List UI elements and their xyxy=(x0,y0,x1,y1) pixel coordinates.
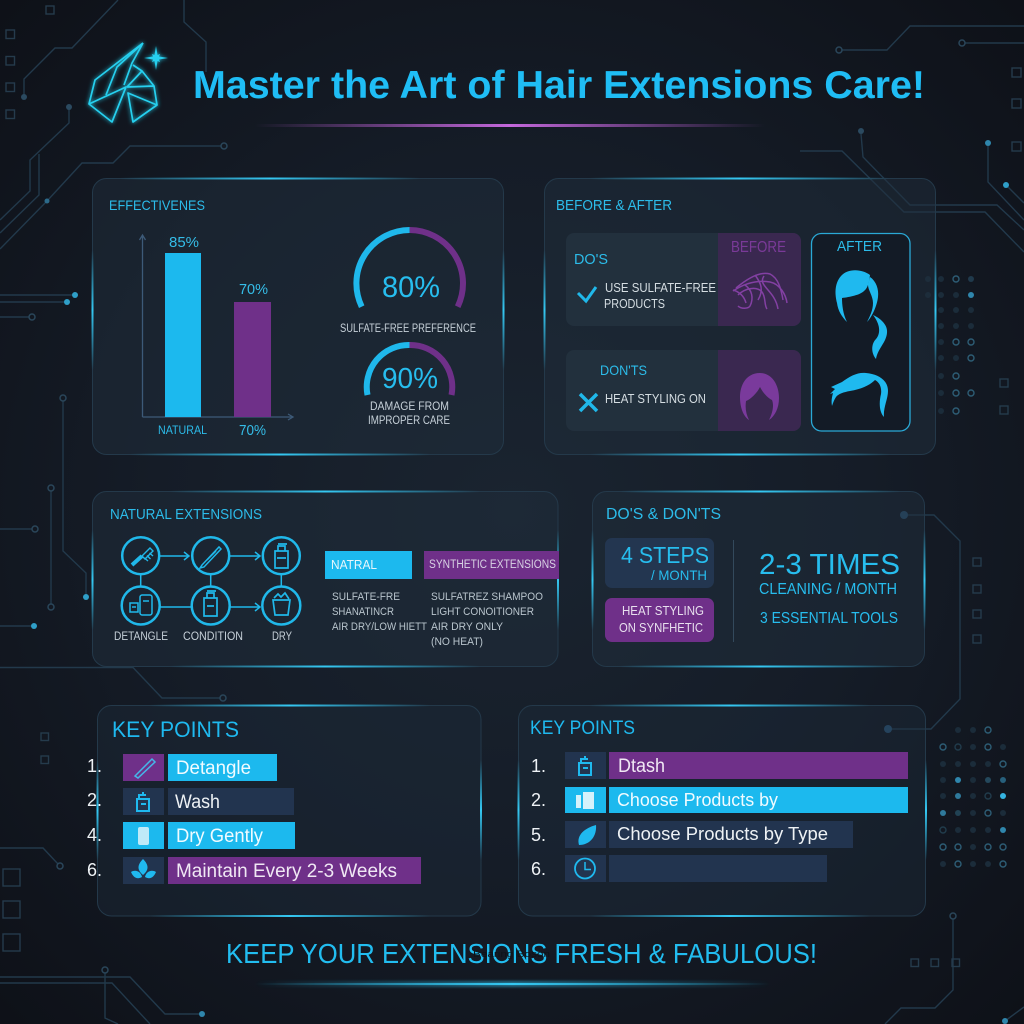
stat: cleaning frequency xyxy=(759,549,900,627)
bar chart: 85% xyxy=(169,235,199,251)
heading: NATURAL EXTENSIONS xyxy=(110,506,262,523)
row: choose products by: 2. xyxy=(531,790,546,810)
icon: messy hair xyxy=(733,273,787,309)
row: choose products by: Choose Products by xyxy=(617,790,778,810)
row: choose products by type xyxy=(531,821,853,848)
card: do's: BEFORE xyxy=(731,239,786,256)
row: choose products by xyxy=(531,787,908,813)
column: natural: SHANATINCR xyxy=(332,606,394,618)
column: synthetic: AIR DRY ONLY xyxy=(431,621,504,633)
row: maintain: Maintain Every 2-3 Weeks xyxy=(176,861,397,882)
bar chart: NATURAL xyxy=(158,423,207,437)
callout: heat styling: ON SYNFHETIC xyxy=(619,621,703,635)
card: do's: DO'S xyxy=(574,251,608,268)
panel: key points right xyxy=(518,704,927,917)
title underline xyxy=(255,124,765,127)
gauge: 80% xyxy=(340,230,476,335)
row: maintain xyxy=(87,857,421,884)
bar chart: 70% xyxy=(239,282,268,298)
footer tagline: KEEP YOUR EXTENSIONS FRESH & FABULOUS! xyxy=(226,938,817,969)
bar chart: 70% xyxy=(239,423,266,439)
heading: BEFORE & AFTER xyxy=(556,197,672,214)
icon: purple hair xyxy=(740,373,779,420)
panel: before and after xyxy=(544,178,936,456)
bar chart xyxy=(140,235,293,439)
decorative dot matrix xyxy=(925,276,1006,867)
column: natural: NATRAL xyxy=(331,558,377,572)
step icons xyxy=(130,544,290,616)
row: clock xyxy=(531,855,827,882)
stat: 4 steps xyxy=(605,538,714,588)
flow labels: DETANGLE xyxy=(114,631,168,643)
row: dtash: 1. xyxy=(531,756,546,776)
icon: blue hair with ponytail xyxy=(836,270,887,359)
row: dry gently: 4. xyxy=(87,825,102,845)
flow labels: DRY xyxy=(272,631,292,643)
heading: KEY POINTS xyxy=(112,717,239,742)
icon: blue hair side sweep xyxy=(830,373,888,417)
watermark text: Bearing Boson xyxy=(473,949,550,960)
panel: natural extensions xyxy=(92,490,559,668)
card: after: AFTER xyxy=(837,238,882,255)
row: detangle: Detangle xyxy=(176,758,251,779)
heading: EFFECTIVENES xyxy=(109,197,205,213)
stat: 4 steps: 4 STEPS xyxy=(621,542,709,568)
row: choose products by type: 5. xyxy=(531,825,546,845)
column: synthetic xyxy=(424,551,559,648)
card: don'ts: HEAT STYLING ON xyxy=(605,392,706,406)
heading: DO'S & DON'TS xyxy=(606,506,721,523)
row: dry gently: Dry Gently xyxy=(176,826,263,847)
icon: check mark xyxy=(578,287,596,301)
column: synthetic: (NO HEAT) xyxy=(431,636,483,648)
column: natural xyxy=(325,551,427,633)
card: after xyxy=(812,234,910,431)
column: natural: SULFATE-FRE xyxy=(332,591,400,603)
gauge: 90% xyxy=(367,345,452,427)
callout: heat styling xyxy=(605,598,714,642)
footer glow line xyxy=(255,981,770,987)
row: wash: 2. xyxy=(87,790,102,810)
gauge: 80%: 80% xyxy=(382,271,440,304)
gauge: 90%: IMPROPER CARE xyxy=(368,415,450,427)
card: do's: PRODUCTS xyxy=(604,297,665,311)
row: wash xyxy=(87,788,294,815)
flow labels: CONDITION xyxy=(183,631,243,643)
panel: effectiveness xyxy=(92,178,504,456)
card: do's xyxy=(566,233,801,326)
row: dtash xyxy=(531,752,908,779)
row: wash: Wash xyxy=(175,792,220,813)
panel: do's and don'ts xyxy=(592,490,926,668)
column: synthetic: SULFATREZ SHAMPOO xyxy=(431,591,543,603)
stat: 4 steps: / MONTH xyxy=(651,567,707,583)
column: natural: AIR DRY/LOW HIETT xyxy=(332,621,427,633)
icon: cross xyxy=(580,394,597,411)
row: maintain: 6. xyxy=(87,860,102,880)
card: do's: USE SULFATE-FREE xyxy=(605,281,716,295)
gauge: 80%: SULFATE-FREE PREFERENCE xyxy=(340,323,476,335)
row: dtash: Dtash xyxy=(618,756,665,777)
column: synthetic: LIGHT CONOITIONER xyxy=(431,606,534,618)
gauge: 90%: 90% xyxy=(382,363,438,395)
heading: KEY POINTS xyxy=(530,718,635,739)
flow arrows xyxy=(141,552,281,611)
row: detangle xyxy=(87,754,277,781)
card: don'ts xyxy=(566,350,801,431)
panel: key points left xyxy=(87,704,482,917)
column: synthetic: SYNTHETIC EXTENSIONS xyxy=(429,559,556,571)
stat: cleaning frequency: CLEANING / MONTH xyxy=(759,581,897,598)
flow labels xyxy=(114,631,292,643)
logo icon: crystal hair and star xyxy=(89,43,168,122)
callout: heat styling: HEAT STYLING xyxy=(622,604,704,618)
stat: cleaning frequency: 3 ESSENTIAL TOOLS xyxy=(760,610,898,627)
card: don'ts: DON'TS xyxy=(600,362,647,378)
row: detangle: 1. xyxy=(87,756,102,776)
process flow xyxy=(122,537,300,624)
row: clock: 6. xyxy=(531,859,546,879)
row: choose products by type: Choose Products by Type xyxy=(617,824,828,844)
stat: cleaning frequency: 2-3 TIMES xyxy=(759,549,900,581)
gauge: 90%: DAMAGE FROM xyxy=(370,401,449,413)
row: dry gently xyxy=(87,822,295,849)
title: Master the Art of Hair Extensions Care! xyxy=(193,64,925,107)
